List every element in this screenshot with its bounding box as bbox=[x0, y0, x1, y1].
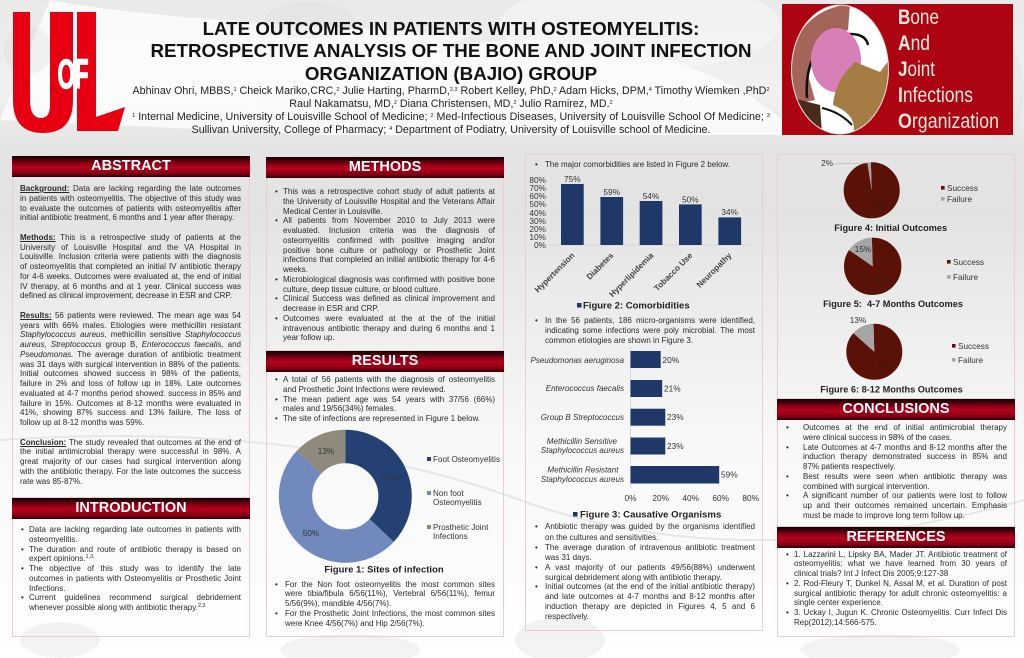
panel: methods: • bbox=[275, 187, 278, 196]
panel: introduction bbox=[12, 498, 250, 637]
chart: figure 1 sites of infection donut: Non foot bbox=[433, 489, 464, 498]
chart: figure 1 sites of infection donut: Prosthetic Joint bbox=[433, 523, 489, 532]
heading: results: RESULTS bbox=[352, 353, 418, 369]
abstract text: University of Louisville Hospital and the VA Hospital in bbox=[20, 242, 241, 252]
abstract text: initial antibiotic treatment, 6 months and 1 year after therapy. bbox=[20, 213, 234, 222]
panel: conclusions bbox=[777, 399, 1015, 527]
chart: figure 6 8-12 months outcomes: Failure bbox=[958, 356, 983, 365]
abstract text: defined as clinical improvement, decrease in ESR and CRP. bbox=[20, 291, 232, 300]
abstract text: rate was 85-87%. bbox=[20, 476, 82, 486]
heading: references bbox=[777, 527, 1015, 548]
treatment bullets: surgical debridement along with antibiotic therapy. bbox=[545, 573, 722, 582]
panel: results: • bbox=[275, 609, 278, 618]
panel: results continued: • bbox=[535, 563, 538, 572]
panel: results continued: • bbox=[535, 543, 538, 552]
heading: introduction bbox=[12, 498, 250, 519]
references list: single center experience. bbox=[794, 598, 883, 607]
chart: figure 4 initial outcomes: 98% bbox=[872, 200, 888, 209]
references list: osteomyelitis: what we have learned from 30 years of bbox=[794, 559, 1007, 568]
chart: figure 2 comorbidities: Neuropathy bbox=[695, 251, 734, 290]
panel: results: • bbox=[275, 394, 278, 404]
chart: figure 4 initial outcomes: 2% bbox=[821, 159, 833, 168]
chart: figure 2 comorbidities: 0% bbox=[534, 240, 547, 250]
methods bullets: Medical Center in Louisville. bbox=[283, 206, 383, 216]
chart: figure 4 initial outcomes: Figure 4: Initial Outcomes bbox=[834, 223, 947, 233]
conclusions bullets: Best results were seen when antibiotic therapy was bbox=[803, 472, 1007, 481]
panel: abstract bbox=[12, 156, 250, 498]
heading: methods bbox=[266, 157, 504, 178]
logo: Bone and Joint Infections Organization bbox=[782, 4, 1013, 135]
authors and affiliations bbox=[132, 84, 770, 136]
authors and affiliations: 1 Internal Medicine, University of Louisville School of Medicine; 2 Med-Infectious Diseases, University of Louisville School Of Medicine; 3 bbox=[132, 111, 770, 123]
chart: figure 6 8-12 months outcomes: Figure 6: 8-12 Months Outcomes bbox=[820, 384, 963, 394]
chart: figure 2 comorbidities: Hypertension bbox=[533, 251, 576, 294]
chart: figure 6 8-12 months outcomes bbox=[820, 316, 989, 394]
micro-organisms bullet: In the 56 patients, 186 micro-organisms were identified, bbox=[545, 316, 755, 325]
conclusions bullets: must be made to improve long term follow up. bbox=[803, 511, 965, 520]
abstract text: aureus, Streptococcus group B, Enterococcus faecalis, and bbox=[20, 340, 241, 349]
chart: figure 3 causative organisms: 21% bbox=[664, 384, 681, 394]
panel: references bbox=[777, 527, 1015, 637]
conclusions bullets: were clinical success in 98% of the cases. bbox=[803, 433, 952, 442]
micro-organisms bullet: common etiologies are shown in Figure 3. bbox=[545, 336, 693, 344]
logo: Bone and Joint Infections Organization: Infections bbox=[898, 84, 973, 107]
panel: results: • bbox=[275, 580, 278, 588]
results bullets: The mean patient age was 54 years with 37/56 (66%) bbox=[283, 394, 495, 404]
panel: references: • bbox=[786, 608, 789, 617]
methods bullets: Clinical Success was defined as clinical improvement and bbox=[283, 294, 495, 303]
chart: figure 1 sites of infection donut: 13% bbox=[318, 447, 334, 456]
logo: Bone and Joint Infections Organization: Organization bbox=[898, 110, 999, 133]
chart: figure 3 causative organisms: 23% bbox=[667, 412, 684, 422]
conclusions bullets bbox=[786, 423, 1007, 520]
methods bullets: positive bone culture or pathology or Prosthetic Joint bbox=[283, 246, 495, 254]
panel: conclusions: • bbox=[786, 442, 789, 452]
introduction bullets: The objective of this study was to identify the late bbox=[29, 564, 241, 573]
chart: figure 3 causative organisms: 23% bbox=[667, 441, 684, 451]
panel: methods: • bbox=[275, 294, 278, 303]
references list: surgical antibiotic therapy for adult chronic osteomyelitis: a bbox=[794, 588, 1007, 598]
chart: figure 2 comorbidities: 80% bbox=[529, 175, 547, 185]
introduction bullets: Data are lacking regarding late outcomes in patients with bbox=[29, 525, 241, 534]
chart: figure 2 comorbidities: Figure 2: Comorbidities bbox=[583, 300, 690, 312]
heading: references: REFERENCES bbox=[846, 529, 946, 545]
chart: figure 3 causative organisms: Staphylococcus aureus bbox=[541, 475, 624, 484]
abstract text: of osteomyelitis that completed an initial IV antibiotic therapy bbox=[20, 262, 241, 271]
conclusions bullets: induction therapy demonstrated success in 85% and bbox=[803, 452, 1007, 461]
panel: results continued: • bbox=[535, 582, 538, 591]
conclusions bullets: Late Outcomes at 4-7 months and 8-12 months after the bbox=[803, 442, 1007, 452]
title bbox=[150, 18, 752, 84]
treatment bullets: Antibiotic therapy was guided by the organisms identified bbox=[545, 522, 755, 531]
chart: figure 2 comorbidities: 70% bbox=[529, 183, 547, 193]
abstract text: in patients with osteomyelitis. The objective of this study was bbox=[20, 194, 241, 203]
chart: figure 1 sites of infection donut bbox=[278, 430, 500, 576]
references list: clinical trials? Int J Infect Dis 2005;9:127-38 bbox=[794, 569, 948, 578]
panel: methods: • bbox=[275, 216, 278, 225]
micro-organisms bullet: indicating some infections were poly microbial. The most bbox=[545, 326, 755, 335]
methods bullets: decrease in ESR and CRP. bbox=[283, 304, 379, 313]
methods bullets: year follow up. bbox=[283, 333, 335, 342]
abstract text: Results: 56 patients were reviewed. The mean age was 54 bbox=[20, 311, 241, 320]
logo: University of Louisville bbox=[13, 12, 125, 133]
references list bbox=[786, 550, 1007, 627]
results bullets: males and 19/56(34%) females. bbox=[283, 404, 396, 413]
references list: Rep(2012);14:566-575. bbox=[794, 618, 877, 627]
results bullets: The site of infections are represented in Figure 1 below. bbox=[283, 414, 480, 423]
panel: results continued: • bbox=[535, 522, 538, 531]
chart: figure 2 comorbidities: 59% bbox=[603, 187, 621, 197]
chart: figure 1 sites of infection donut: Infections bbox=[433, 532, 468, 541]
panel: introduction: • bbox=[21, 564, 24, 573]
treatment bullets: on the cultures and sensitivities. bbox=[545, 533, 658, 542]
bullets below figure 1 bbox=[275, 580, 495, 628]
chart: figure 2 comorbidities: Diabetes bbox=[585, 251, 616, 282]
chart: figure 5 4-7 months outcomes: 85% bbox=[876, 275, 892, 284]
panel: outcome figures bbox=[777, 154, 1015, 399]
chart: figure 3 causative organisms: 80% bbox=[742, 493, 760, 503]
panel: references: • bbox=[786, 579, 789, 588]
panel: results continued: • bbox=[535, 160, 538, 169]
chart: figure 4 initial outcomes: Failure bbox=[947, 195, 972, 204]
chart: figure 3 causative organisms: Figure 3: Causative Organisms bbox=[580, 510, 721, 520]
results bullets: and Prosthetic Joint Infections were reviewed. bbox=[283, 385, 446, 394]
heading: results bbox=[266, 351, 504, 372]
introduction bullets: whenever possible along with antibiotic therapy.2,3 bbox=[29, 603, 206, 612]
chart: figure 2 comorbidities: Hyperlipidemia bbox=[608, 251, 656, 299]
chart: figure 3 causative organisms bbox=[530, 346, 760, 520]
chart: figure 1 sites of infection donut: 37% bbox=[383, 473, 399, 482]
abstract text: failure in 15%. Outcomes at 8-12 months were evaluated in bbox=[20, 398, 241, 408]
treatment bullets: respectively. bbox=[545, 612, 589, 621]
chart: figure 3 causative organisms: Pseudomonas aeruginosa bbox=[530, 356, 625, 365]
introduction bullets: The duration and route of antibiotic therapy is based on bbox=[29, 544, 241, 554]
panel: references: • bbox=[786, 550, 789, 558]
abstract text: to evaluate the outcomes of patients with osteomyelitis after bbox=[20, 204, 241, 212]
panel: results: • bbox=[275, 414, 278, 423]
abstract text: Louisville. Inclusion criteria were patients with the diagnosis bbox=[20, 252, 241, 261]
chart: figure 1 sites of infection donut: Osteomyelitis bbox=[433, 498, 482, 507]
panel: results: • bbox=[275, 375, 278, 384]
conclusions bullets: A significant number of our patients were lost to follow bbox=[803, 491, 1007, 500]
logo: University of Louisville: OF bbox=[58, 51, 88, 97]
abstract text: with the antibiotic therapy. For the late outcomes the success bbox=[20, 467, 241, 476]
chart: figure 3 causative organisms: 60% bbox=[712, 493, 730, 503]
panel: results continued bbox=[525, 154, 763, 631]
abstract text: follow up at 8-12 months was 59%. bbox=[20, 418, 144, 427]
authors and affiliations: Abhinav Ohri, MBBS,1 Cheick Mariko,CRC,2 Julie Harting, PharmD,2,3 Robert Kelley, PhD,2 Adam Hicks, DPM,4 Timothy Wiemken ,PhD2 bbox=[133, 84, 769, 96]
panel: introduction: • bbox=[21, 525, 24, 534]
chart: figure 3 causative organisms: 0% bbox=[624, 493, 637, 503]
chart: figure 2 comorbidities bbox=[529, 174, 750, 312]
abstract text: Staphylococcus aureus, methicillin sensitive Staphylococcus bbox=[20, 330, 241, 339]
logo: Bone and Joint Infections Organization: Joint bbox=[898, 58, 935, 81]
chart: figure 4 initial outcomes: Success bbox=[947, 184, 978, 193]
abstract text bbox=[20, 184, 241, 486]
heading: introduction: INTRODUCTION bbox=[75, 500, 187, 516]
treatment bullets: Initial outcomes (at the end of the initial antibiotic therapy) bbox=[545, 582, 755, 591]
methods bullets: evaluated. Inclusion criteria was the diagnosis of bbox=[283, 226, 495, 235]
chart: figure 2 comorbidities: 30% bbox=[529, 216, 547, 226]
title: RETROSPECTIVE ANALYSIS OF THE BONE AND JOINT INFECTION bbox=[150, 40, 752, 61]
chart: figure 6 8-12 months outcomes: Success bbox=[958, 342, 989, 351]
title: ORGANIZATION (BAJIO) GROUP bbox=[305, 63, 597, 84]
introduction bullets: Current guidelines recommend surgical debridement bbox=[29, 593, 241, 602]
introduction bullets: Infections. bbox=[29, 584, 65, 592]
methods bullets: culture, deep tissue culture, or blood culture. bbox=[283, 284, 440, 294]
conclusions bullets: combined with surgical intervention. bbox=[803, 482, 930, 490]
abstract text: years with 66% males. Etiologies were methicillin resistant bbox=[20, 320, 241, 330]
results bullets: A total of 56 patients with the diagnosis of osteomyelitis bbox=[283, 375, 495, 384]
authors and affiliations: Raul Nakamatsu, MD,2 Diana Christensen, MD,2 Julio Ramirez, MD.2 bbox=[289, 98, 613, 110]
chart: figure 2 comorbidities: 10% bbox=[529, 232, 547, 242]
heading: abstract bbox=[12, 156, 250, 177]
treatment bullets: The average duration of intravenous antibiotic treatment bbox=[545, 543, 755, 552]
abstract text: failure in 2% and loss of follow up in 18%. Late outcomes bbox=[20, 379, 241, 388]
abstract text: Initial outcomes showed success in 98% of the patients, bbox=[20, 369, 241, 378]
panel: methods: • bbox=[275, 275, 278, 284]
chart: figure 3 causative organisms: 40% bbox=[682, 493, 700, 503]
chart: figure 2 comorbidities: 34% bbox=[721, 207, 739, 217]
references list: 1. Lazzarini L, Lipsky BA, Mader JT. Antibiotic treatment of bbox=[794, 550, 1007, 558]
methods bullets: Microbiological diagnosis was confirmed with positive bone bbox=[283, 275, 495, 284]
bullets below figure 1: For the Prosthetic Joint Infections, the most common sites bbox=[285, 609, 495, 618]
methods bullets: Outcomes were evaluated at the at the of the initial bbox=[283, 314, 495, 323]
panel: conclusions: • bbox=[786, 472, 789, 481]
chart: figure 3 causative organisms: Methicillin Resistant bbox=[547, 466, 619, 474]
heading: conclusions: CONCLUSIONS bbox=[842, 401, 950, 417]
panel: conclusions: • bbox=[786, 423, 789, 432]
abstract text: for 4-6 weeks. Outcomes were evaluated at, the end of initial bbox=[20, 272, 241, 281]
panel: introduction: • bbox=[21, 544, 24, 554]
methods bullets bbox=[275, 187, 495, 342]
treatment bullets: and late outcomes at 4-7 months and 8-12 months after bbox=[545, 592, 755, 601]
abstract text: great majority of our cases had surgical intervention along bbox=[20, 457, 241, 466]
introduction bullets bbox=[21, 525, 241, 612]
heading: methods: METHODS bbox=[349, 159, 421, 175]
results bullets bbox=[275, 375, 495, 423]
treatment bullets bbox=[535, 522, 755, 621]
chart: figure 5 4-7 months outcomes: Failure bbox=[953, 273, 978, 282]
chart: figure 2 comorbidities: 60% bbox=[529, 191, 547, 201]
abstract text: Conclusion: The study revealed that outcomes at the end of bbox=[20, 438, 241, 446]
chart: figure 6 8-12 months outcomes: 13% bbox=[850, 316, 866, 325]
abstract text: the initial antimicrobial therapy were successful in 98%. A bbox=[20, 447, 241, 456]
chart: figure 2 comorbidities: Tobacco Use bbox=[652, 251, 695, 293]
abstract text: IV therapy, at 6 months and at 1 year. Clinical success was bbox=[20, 282, 241, 290]
panel: methods: • bbox=[275, 314, 278, 323]
chart: figure 6 8-12 months outcomes: 87% bbox=[878, 361, 894, 370]
heading: abstract: ABSTRACT bbox=[91, 158, 171, 174]
chart: figure 3 causative organisms: 20% bbox=[662, 355, 680, 365]
chart: figure 1 sites of infection donut: Foot Osteomyelitis bbox=[433, 455, 500, 464]
methods bullets: intravenous antibiotic therapy and during 6 months and 1 bbox=[283, 324, 495, 332]
micro-organisms bullet bbox=[535, 316, 755, 344]
methods bullets: weeks. bbox=[283, 265, 308, 274]
introduction bullets: osteomyelitis. bbox=[29, 535, 77, 544]
chart: figure 3 causative organisms: 59% bbox=[721, 470, 738, 480]
chart: figure 2 comorbidities: 54% bbox=[643, 191, 660, 201]
logo: Bone and Joint Infections Organization: And bbox=[898, 32, 930, 55]
methods bullets: the University of Louisville Hospital and the Veterans Affair bbox=[283, 197, 495, 206]
chart: figure 2 comorbidities: 50% bbox=[529, 199, 547, 209]
chart: figure 3 causative organisms: Methicillin Sensitive bbox=[547, 437, 618, 446]
abstract text: 41%, showing 87% success and 13% failure. The loss of bbox=[20, 408, 241, 417]
treatment bullets: A vast majority of our patients 49/56(88%) underwent bbox=[545, 563, 755, 572]
panel: results continued: • bbox=[535, 316, 538, 325]
bullets below figure 1: were tibia/fibula 6/56(11%), Vertebral 6/56(11%), femur bbox=[285, 589, 495, 598]
panel: conclusions: • bbox=[786, 491, 789, 500]
methods bullets: All patients from November 2010 to July 2013 were bbox=[283, 216, 495, 225]
abstract text: was 31 days with surgical intervention in 88% of the patients. bbox=[20, 360, 241, 368]
chart: figure 3 causative organisms: Group B Streptococcus bbox=[541, 413, 624, 422]
chart: figure 2 comorbidities: 75% bbox=[564, 174, 581, 184]
chart: figure 3 causative organisms: 20% bbox=[652, 493, 670, 503]
treatment bullets: was 31 days. bbox=[545, 553, 592, 562]
panel: results bbox=[266, 351, 504, 637]
abstract text: Pseudomonas. The average duration of antibiotic treatment bbox=[20, 350, 241, 359]
chart: figure 2 comorbidities: 50% bbox=[682, 194, 699, 204]
comorbidities intro bullet: The major comorbidities are listed in Figure 2 below. bbox=[545, 160, 730, 169]
heading: conclusions bbox=[777, 399, 1015, 420]
abstract text: Methods: This is a retrospective study of patients at the bbox=[20, 233, 241, 242]
methods bullets: infections that completed an initial antibiotic therapy for 4-6 bbox=[283, 255, 495, 264]
chart: figure 2 comorbidities: 20% bbox=[529, 224, 547, 234]
introduction bullets: outcomes in patients with Osteomyelitis or Prosthetic Joint bbox=[29, 574, 241, 583]
title: LATE OUTCOMES IN PATIENTS WITH OSTEOMYELITIS: bbox=[203, 18, 699, 39]
authors and affiliations: Sullivan University, College of Pharmacy; 4 Department of Podiatry, University of Louisville school of Medicine. bbox=[192, 124, 710, 136]
panel: introduction: • bbox=[21, 593, 24, 602]
abstract text: Background: Data are lacking regarding the late outcomes bbox=[20, 184, 241, 193]
methods bullets: osteomyelitis confirmed with positive imaging and/or bbox=[283, 236, 495, 245]
chart: figure 3 causative organisms: Staphylococcus aureus bbox=[541, 446, 624, 455]
references list: 2. Rod-Fleury T, Dunkel N, Assal M, et al. Duration of post bbox=[794, 579, 1007, 588]
abstract text: evaluated at 4-7 months period showed: success in 85% and bbox=[20, 389, 241, 398]
conclusions bullets: 87% patients respectively. bbox=[803, 462, 895, 471]
conclusions bullets: up and their outcomes remained uncertain. Emphasis bbox=[803, 501, 1007, 510]
references list: 3. Uckay I, Jugun K. Chronic Osteomyelitis. Curr Infect Dis bbox=[794, 608, 1007, 617]
chart: figure 5 4-7 months outcomes bbox=[823, 238, 984, 309]
bullets below figure 1: For the Non foot osteomyelitis the most common sites bbox=[285, 580, 495, 588]
logo: Bone and Joint Infections Organization: Bone bbox=[898, 6, 939, 29]
treatment bullets: induction therapy are depicted in Figures 4, 5 and 6 bbox=[545, 602, 755, 611]
chart: figure 1 sites of infection donut: 50% bbox=[303, 529, 319, 538]
bullets below figure 1: were Knee 4/56(7%) and Hip 2/56(7%). bbox=[285, 618, 425, 628]
chart: figure 5 4-7 months outcomes: 15% bbox=[855, 245, 871, 254]
chart: figure 4 initial outcomes bbox=[821, 159, 978, 233]
conclusions bullets: Outcomes at the end of initial antimicrobial therapy bbox=[803, 423, 1007, 432]
chart: figure 5 4-7 months outcomes: Success bbox=[953, 258, 984, 267]
chart: figure 3 causative organisms: Enterococcus faecalis bbox=[546, 384, 624, 393]
chart: figure 5 4-7 months outcomes: Figure 5: 4-7 Months Outcomes bbox=[823, 299, 963, 309]
panel: methods bbox=[266, 157, 504, 351]
chart: figure 1 sites of infection donut: Figure 1: Sites of infection bbox=[324, 564, 444, 576]
chart: figure 2 comorbidities: 40% bbox=[529, 208, 547, 218]
introduction bullets: expert opinions.1,3, bbox=[29, 554, 95, 563]
methods bullets: This was a retrospective cohort study of adult patients at bbox=[283, 187, 495, 196]
bullets below figure 1: 5/56(9%), mandible 4/56(7%). bbox=[285, 599, 391, 608]
